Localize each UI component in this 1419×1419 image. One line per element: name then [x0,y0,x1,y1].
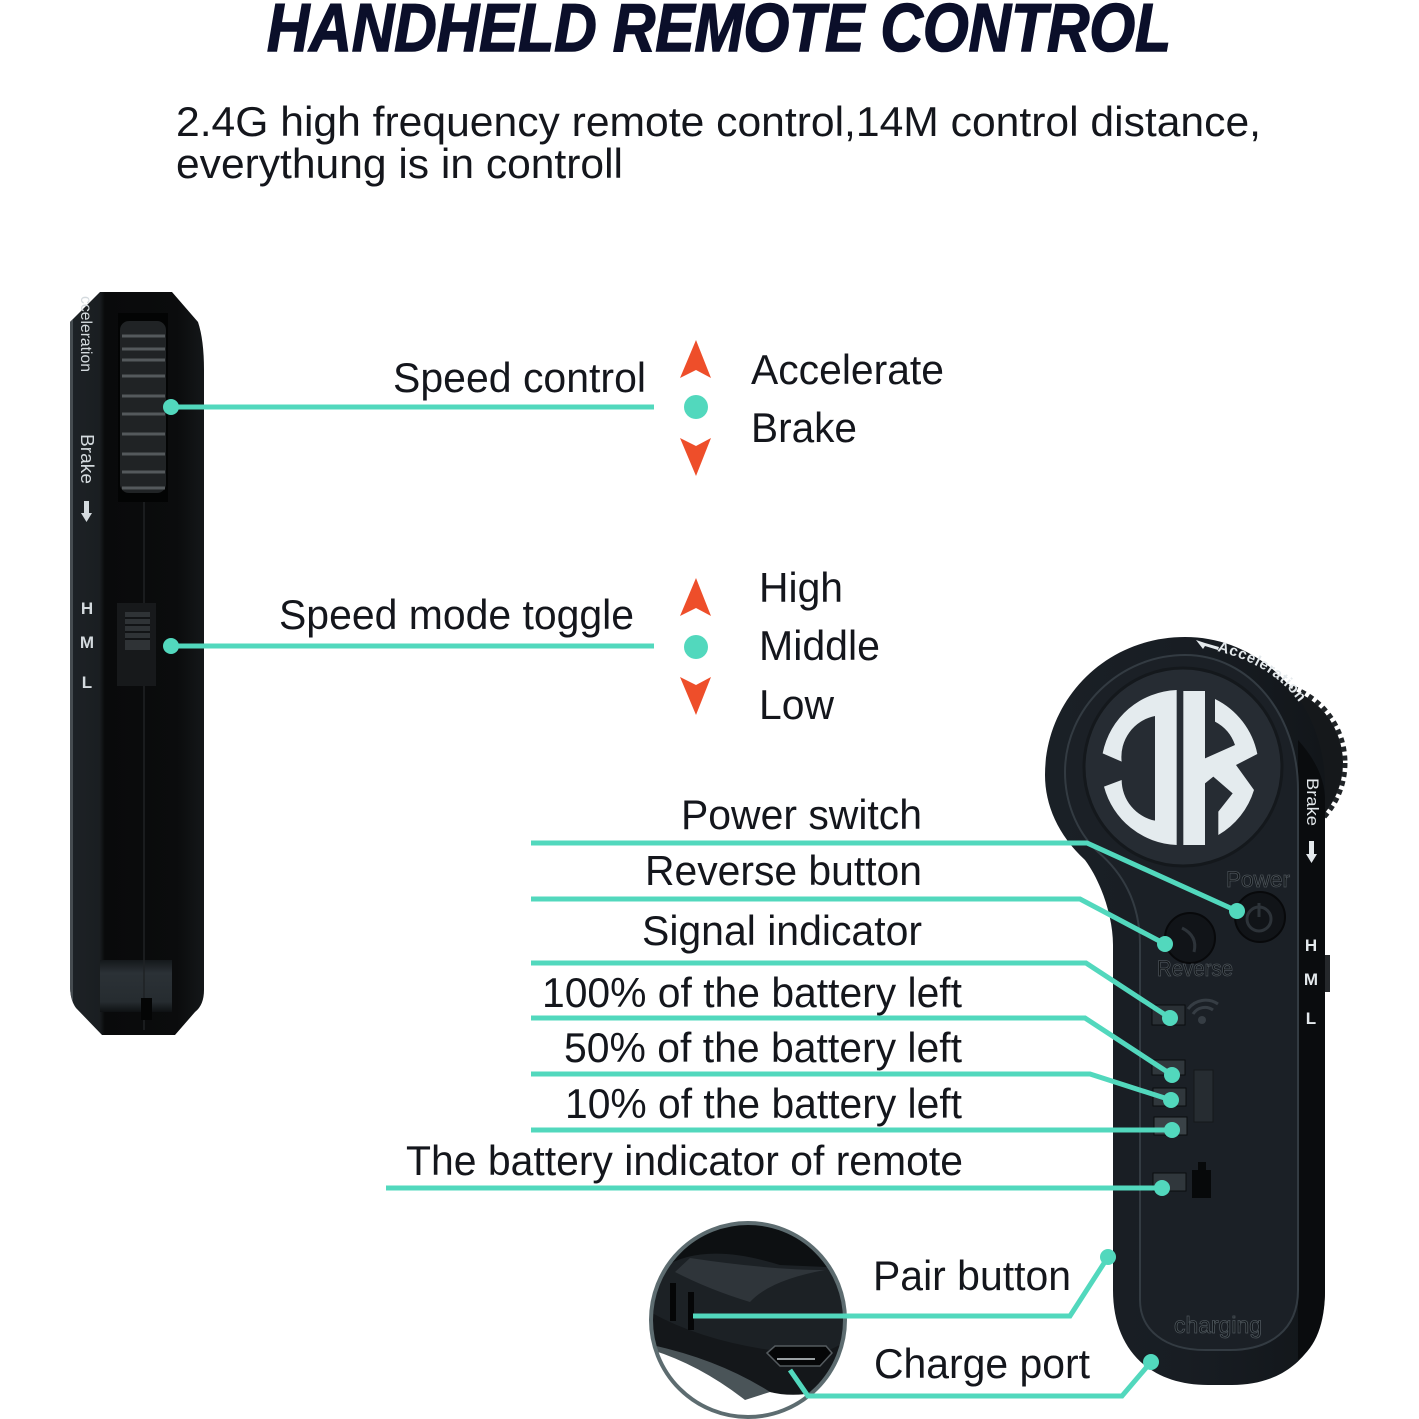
acceleration label: Acceleration [1218,642,1304,702]
speed mode toggle switch [117,603,156,686]
logo disc [1084,668,1282,866]
speed control indicator: accelerate and brake: Accelerate [751,346,944,393]
side labels [77,296,97,692]
speed wheel [118,313,168,502]
callout: speed mode toggle: Speed mode toggle [279,591,634,638]
charging label: charging [1174,1312,1262,1338]
reverse button [1157,913,1233,981]
callout: pair button [693,1249,1116,1316]
callout: 100% battery [531,969,1180,1083]
callout: 10% battery: 10% of the battery left [565,1080,962,1127]
callout: power switch: Power switch [681,791,922,838]
callout: charge port: Charge port [874,1340,1090,1387]
speed mode indicator: high, middle, low [680,564,880,728]
knurled wheel [1185,683,1345,843]
subtitle text block: 2.4G high frequency remote control,14M control distance, [176,98,1261,145]
callout: 50% battery [531,1024,1179,1108]
side labels: Brake [77,434,97,484]
callout: charge port [790,1340,1159,1396]
brake and H M L labels: Brake [1303,778,1322,826]
side labels: H [81,599,93,618]
side labels: cceleration [77,296,94,372]
side labels: M [80,633,94,652]
power button [1226,867,1290,942]
toggle edge [1325,955,1330,992]
callout: speed control: Speed control [393,354,646,401]
side labels: L [82,673,92,692]
callout: speed mode toggle [163,591,654,654]
callout: speed control [163,354,654,415]
callout: signal indicator: Signal indicator [642,907,922,954]
main front view of remote [1045,637,1348,1385]
callout: reverse button [531,847,1173,952]
speed control indicator: accelerate and brake [680,340,944,476]
callout: remote battery indicator: The battery indicator of remote [406,1137,963,1184]
callout: 10% battery [531,1080,1180,1138]
callout: 100% battery: 100% of the battery left [542,969,962,1016]
side view of remote [70,292,204,1037]
speed control indicator: accelerate and brake: Brake [751,404,857,451]
brake and H M L labels: H [1305,936,1317,955]
signal indicator [1152,1000,1218,1025]
callout: remote battery indicator [386,1137,1170,1196]
callout: signal indicator [531,907,1178,1026]
power button: Power [1226,867,1290,892]
speed mode indicator: high, middle, low: High [759,564,843,611]
brake and H M L labels: M [1304,970,1318,989]
inset: close-up of pair button and charge port [650,1222,848,1418]
callout: power switch [531,791,1245,919]
subtitle text block: everythung is in controll [176,140,623,187]
subtitle text block [176,98,1261,187]
callout: reverse button: Reverse button [645,847,922,894]
brake and H M L labels: L [1306,1009,1316,1028]
callout: 50% battery: 50% of the battery left [564,1024,962,1071]
speed mode indicator: high, middle, low: Low [759,681,835,728]
speed mode indicator: high, middle, low: Middle [759,622,880,669]
remote battery indicator [1153,1162,1211,1198]
brake and H M L labels [1303,778,1322,1028]
battery level indicators [1152,1060,1213,1135]
callout: pair button: Pair button [873,1252,1071,1299]
reverse button: Reverse [1157,956,1233,981]
